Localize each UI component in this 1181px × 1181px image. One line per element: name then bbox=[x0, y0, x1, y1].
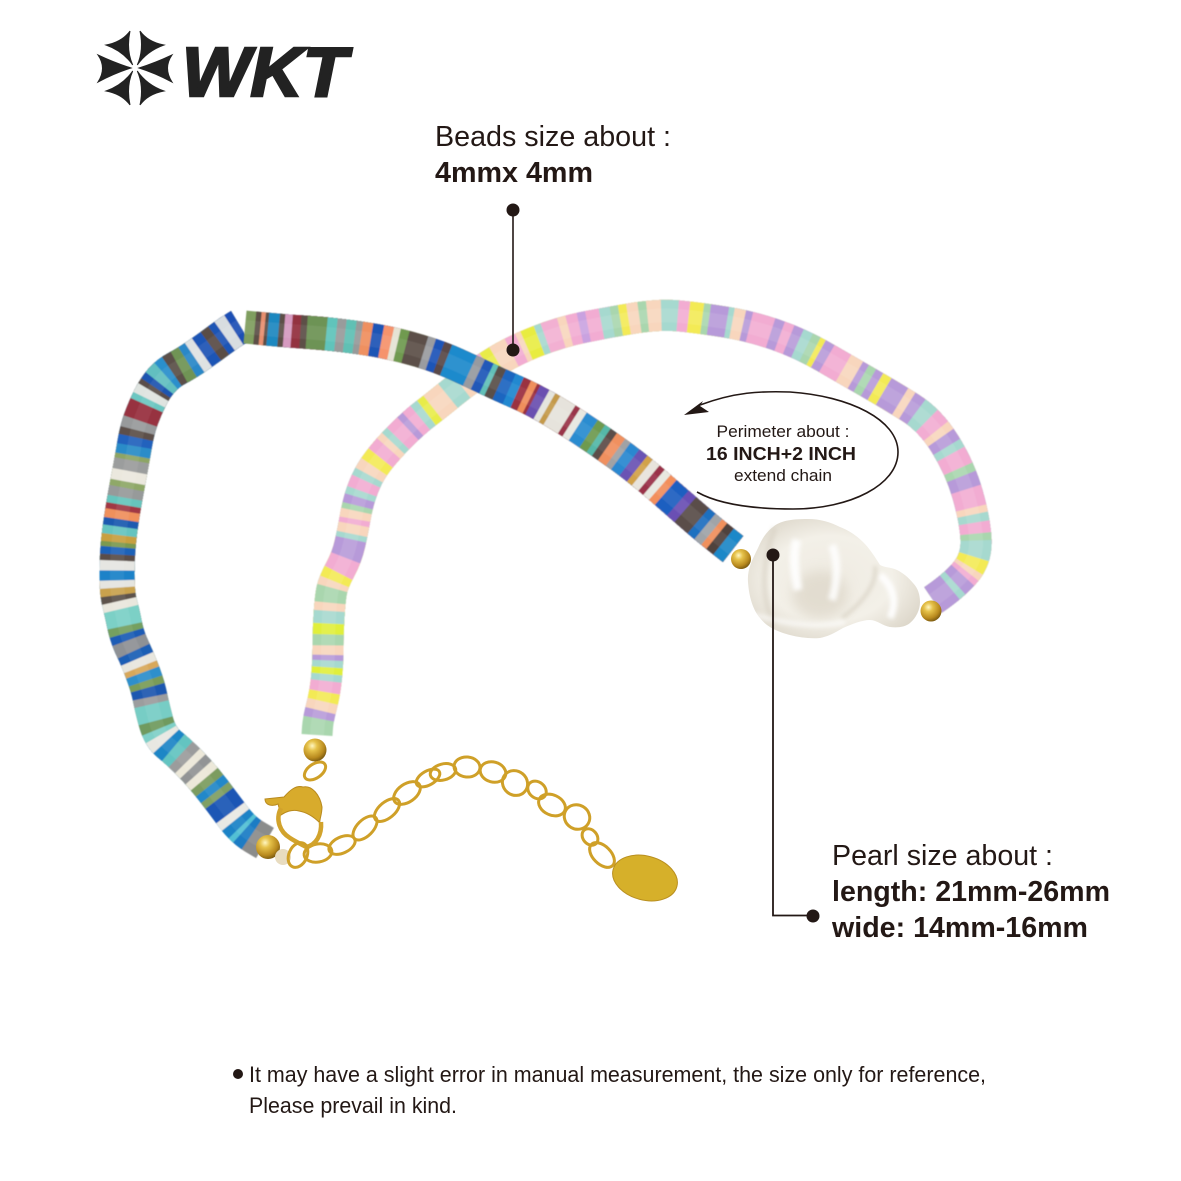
text: perimeter bbox=[706, 423, 856, 485]
text: perimeter: Perimeter about : bbox=[716, 423, 850, 441]
extender chain with tag bbox=[303, 756, 683, 908]
footnote: It may have a slight error in manual measurement, the size only for reference, bbox=[249, 1062, 986, 1087]
strand: pastel beads bbox=[317, 315, 976, 735]
footnote: Please prevail in kind. bbox=[249, 1093, 457, 1118]
leader line: beads bbox=[506, 204, 520, 356]
text: pearl size: wide: 14mm-16mm bbox=[831, 912, 1088, 944]
arrow: perimeter loop bbox=[684, 392, 898, 509]
strand: bright beads, right section bbox=[245, 327, 733, 549]
heading: beads size: 4mmx 4mm bbox=[435, 157, 593, 189]
chain links bbox=[303, 756, 632, 884]
text: perimeter: 16 INCH+2 INCH bbox=[706, 444, 856, 464]
heading: beads size: Beads size about : bbox=[435, 121, 671, 153]
text: perimeter: extend chain bbox=[734, 467, 832, 485]
strand: bright beads, left section bbox=[117, 326, 265, 843]
gold spacer beads bbox=[256, 549, 942, 859]
leader line: pearl bbox=[766, 548, 820, 922]
footnote bbox=[233, 1062, 986, 1118]
logo wordmark: WKT bbox=[182, 33, 352, 111]
baroque pearl bbox=[748, 519, 920, 638]
gold tag bbox=[607, 848, 683, 908]
logo: WKT bbox=[98, 31, 352, 111]
text: pearl size bbox=[831, 840, 1110, 944]
text: pearl size: Pearl size about : bbox=[832, 840, 1053, 872]
icon: snowflake mark bbox=[98, 31, 172, 105]
lobster clasp bbox=[265, 758, 329, 871]
text: pearl size: length: 21mm-26mm bbox=[832, 876, 1110, 908]
heading: beads size bbox=[435, 121, 671, 189]
